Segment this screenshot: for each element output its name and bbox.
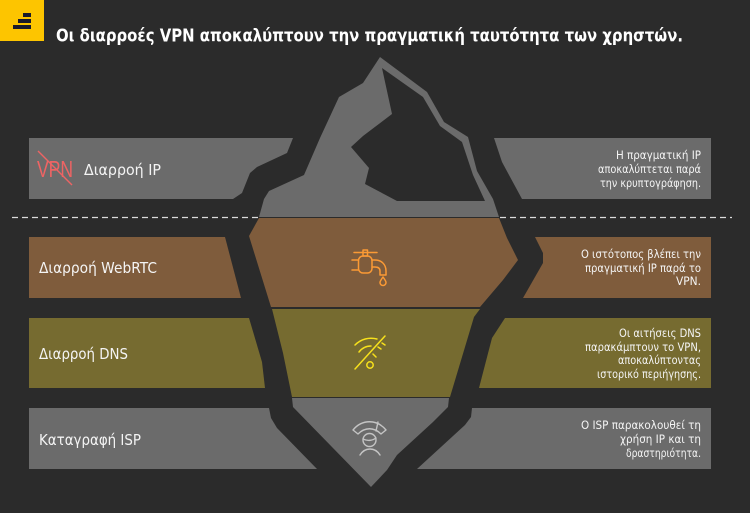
panel: IP leak description bbox=[494, 138, 711, 199]
iceberg band: DNS bbox=[272, 309, 480, 397]
panel: DNS leak description: ιστορικό περιήγησης. bbox=[597, 367, 701, 381]
panel: ISP logging description: δραστηριότητα. bbox=[626, 446, 701, 460]
panel: WebRTC leak description: Ο ιστότοπος βλέπει την bbox=[581, 247, 701, 261]
panel: WebRTC leak description: πραγματική IP παρά το bbox=[585, 261, 701, 275]
icon: monitored user bbox=[353, 422, 386, 455]
panel: WebRTC leak description: VPN. bbox=[676, 274, 701, 288]
panel: WebRTC leak left bbox=[29, 237, 241, 298]
waterline dashed left bbox=[12, 216, 258, 218]
icon: crossed VPN: VPN bbox=[37, 156, 73, 182]
iceberg tip shadow facet bbox=[351, 68, 485, 201]
waterline dashed right bbox=[500, 216, 732, 218]
logo badge bbox=[0, 0, 44, 41]
panel: DNS leak description: Οι αιτήσεις DNS bbox=[619, 326, 701, 340]
iceberg bbox=[249, 57, 518, 487]
panel: DNS leak description: αποκαλύπτοντας bbox=[618, 353, 701, 367]
iceberg band: WebRTC bbox=[249, 218, 518, 307]
panel: ISP logging left bbox=[29, 408, 317, 469]
panel: ISP logging description bbox=[417, 408, 711, 469]
panel: WebRTC leak description bbox=[523, 237, 711, 298]
panel: ISP logging description: Ο ISP παρακολουθεί τη bbox=[581, 418, 701, 432]
iceberg band: ISP bbox=[292, 398, 449, 487]
panel: DNS leak description: παρακάμπτουν το VPN, bbox=[585, 340, 701, 354]
label: Καταγραφή ISP bbox=[39, 431, 141, 449]
label: Διαρροή WebRTC bbox=[39, 259, 157, 277]
icon: leaking faucet bbox=[352, 250, 386, 286]
panel: IP leak description: Η πραγματική IP bbox=[616, 148, 701, 162]
panel: DNS leak description bbox=[479, 318, 711, 388]
panel: DNS leak left bbox=[29, 318, 265, 388]
panel: IP leak description: αποκαλύπτεται παρά bbox=[598, 162, 701, 176]
icon: wifi off bbox=[355, 336, 385, 369]
icon: crossed VPN bbox=[37, 151, 73, 185]
panel: ISP logging description: χρήση IP και τη bbox=[620, 432, 701, 446]
panel: IP leak left bbox=[29, 138, 293, 199]
label: Διαρροή IP bbox=[84, 161, 161, 179]
iceberg tip bbox=[259, 57, 499, 217]
panel: IP leak description: την κρυπτογράφηση. bbox=[600, 176, 701, 190]
label: Διαρροή DNS bbox=[39, 345, 128, 363]
